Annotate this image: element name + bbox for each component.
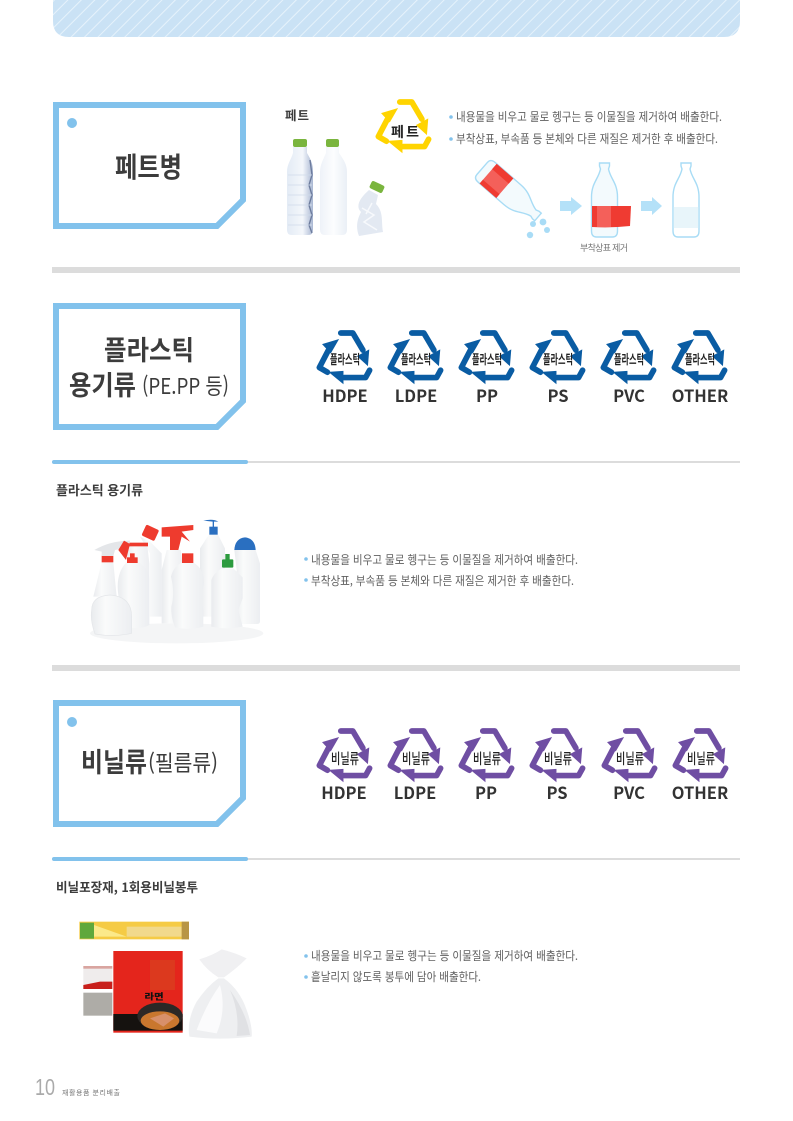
section rule (52, 857, 740, 861)
heading: PET: 페트 (285, 105, 309, 124)
section rule (52, 460, 740, 464)
recycling marks: vinyl: 비닐류 (402, 751, 430, 768)
recycling marks: plastic (319, 333, 728, 407)
photo: vinyl packaging (79, 922, 252, 1039)
divider (52, 665, 740, 671)
footer page number: 재활용품 분리배출 (62, 1088, 121, 1098)
instruction text: plastic: 내용물을 비우고 물로 헹구는 등 이물질을 제거하여 배출한다. (311, 551, 578, 568)
title frame: vinyl: (필름류) (148, 746, 218, 778)
instruction text: vinyl (304, 947, 578, 985)
instruction text: PET (449, 108, 722, 147)
photo: vinyl packaging: 라면 (144, 990, 164, 1002)
heading: plastic containers: 플라스틱 용기류 (56, 480, 143, 499)
panel: vinyl film (52, 703, 740, 1039)
recycling marks: vinyl: 비닐류 (616, 751, 644, 768)
recycling marks: vinyl: PP (475, 780, 497, 804)
title frame: PET: 페트병 (115, 146, 182, 186)
recycling marks: vinyl: OTHER (672, 780, 728, 804)
recycling marks: plastic: 플라스틱 (685, 352, 715, 367)
title frame: plastic: (PE.PP 등) (142, 369, 229, 401)
recycling marks: plastic: 플라스틱 (614, 352, 644, 367)
recycling marks: vinyl: LDPE (394, 780, 436, 804)
recycling marks: plastic: 플라스틱 (543, 352, 573, 367)
divider (52, 267, 740, 273)
icon: PET recycling mark (378, 102, 429, 153)
recycling marks: vinyl: PVC (613, 780, 645, 804)
recycling marks: vinyl: 비닐류 (473, 751, 501, 768)
photo: PET bottles (287, 139, 385, 236)
recycling marks: plastic: 플라스틱 (401, 352, 431, 367)
recycling marks: plastic: OTHER (672, 383, 728, 407)
title frame: vinyl (56, 703, 243, 824)
title frame: PET (56, 105, 243, 226)
instruction text: plastic: 부착상표, 부속품 등 본체와 다른 재질은 제거한 후 배출한다. (311, 572, 574, 589)
recycling marks: plastic: PS (547, 383, 569, 407)
instruction text: PET: 내용물을 비우고 물로 헹구는 등 이물질을 제거하여 배출한다. (456, 108, 722, 125)
footer page number: 10 (35, 1074, 55, 1100)
caption: label removal: 부착상표 제거 (580, 241, 628, 254)
recycling marks: vinyl: 비닐류 (331, 751, 359, 768)
recycling marks: vinyl: 비닐류 (687, 751, 715, 768)
recycling marks: vinyl: 비닐류 (544, 751, 572, 768)
icon label: PET: 페트 (391, 122, 419, 142)
recycling marks: vinyl: PS (546, 780, 568, 804)
instruction text: vinyl: 흩날리지 않도록 봉투에 담아 배출한다. (311, 968, 481, 985)
panel: plastic containers (52, 306, 740, 643)
footer page number (35, 1074, 121, 1100)
top hatched band (53, 0, 740, 37)
title frame: plastic: 용기류 (69, 364, 136, 403)
recycling marks: plastic: HDPE (322, 383, 368, 407)
instruction text: plastic (304, 551, 578, 589)
title frame: plastic: 플라스틱 (104, 329, 194, 368)
title frame: vinyl: 비닐류 (81, 741, 147, 780)
recycling marks: vinyl: HDPE (321, 780, 367, 804)
recycling marks: plastic: PVC (613, 383, 645, 407)
recycling marks: plastic: LDPE (395, 383, 437, 407)
recycling marks: plastic: PP (476, 383, 498, 407)
recycling marks: plastic: 플라스틱 (472, 352, 502, 367)
panel: PET bottles (56, 102, 722, 254)
title frame: plastic (56, 306, 243, 427)
instruction text: PET: 부착상표, 부속품 등 본체와 다른 재질은 제거한 후 배출한다. (456, 130, 718, 147)
diagram: rinse and remove label (474, 159, 699, 238)
heading: vinyl packaging: 비닐포장재, 1회용비닐봉투 (56, 877, 198, 896)
instruction text: vinyl: 내용물을 비우고 물로 헹구는 등 이물질을 제거하여 배출한다. (311, 947, 578, 964)
recycling marks: vinyl (319, 731, 728, 804)
photo: plastic containers (90, 520, 263, 643)
recycling marks: plastic: 플라스틱 (330, 352, 360, 367)
